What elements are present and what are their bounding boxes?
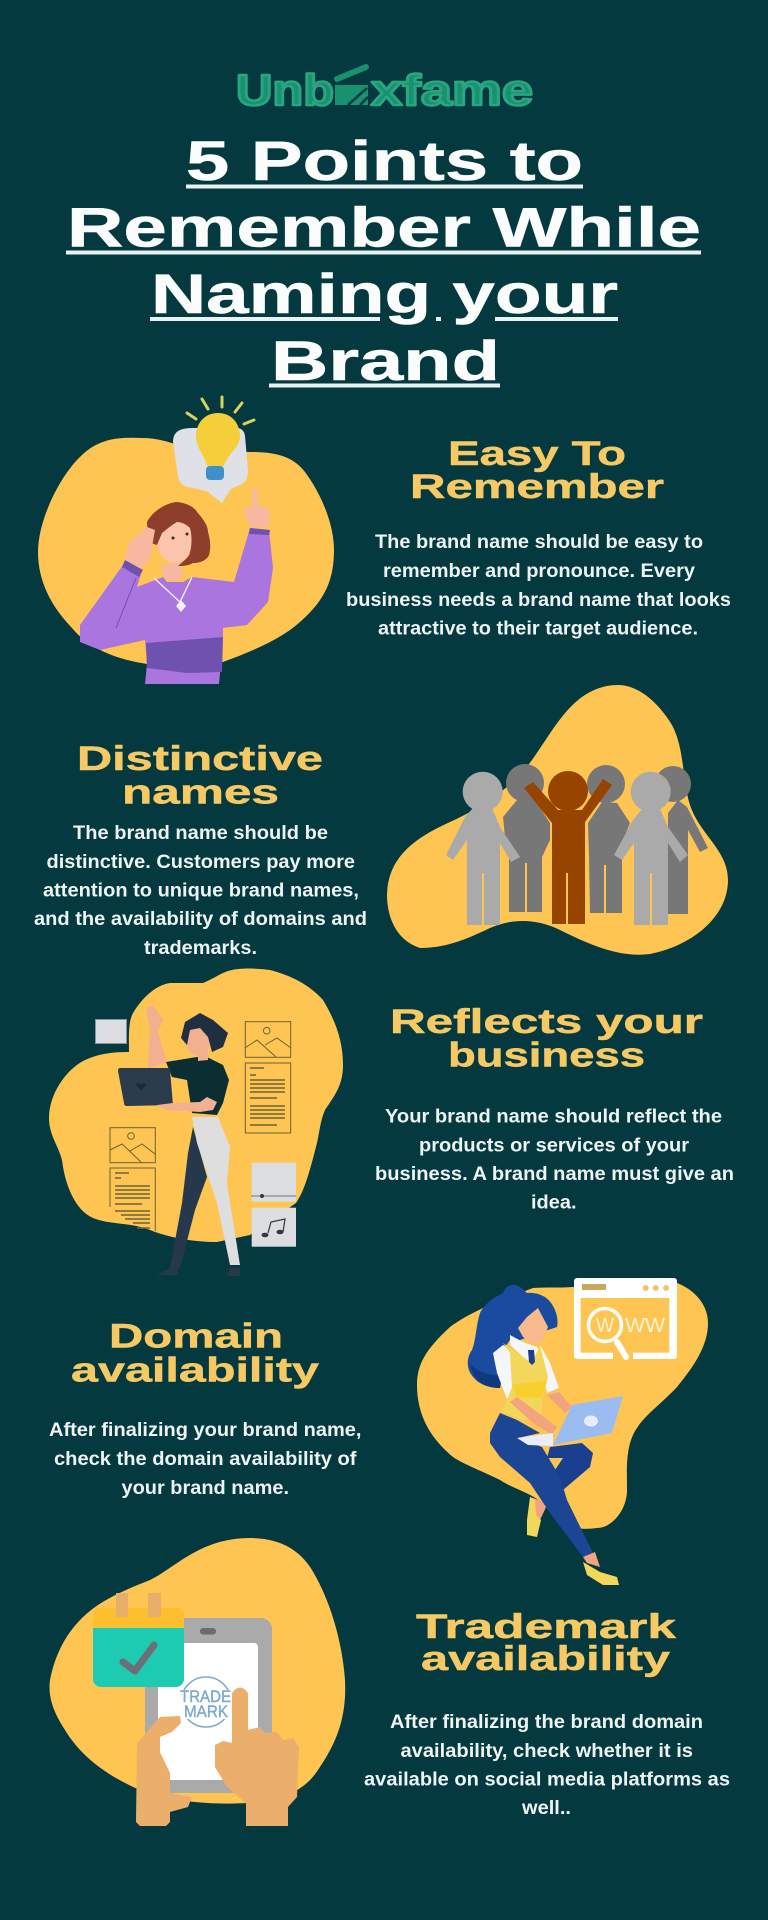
icon: trademark stamp: TRADE xyxy=(180,1688,231,1706)
icon: hands on phone xyxy=(136,1688,299,1826)
title: Remember While xyxy=(67,196,701,258)
heading: Domain availability xyxy=(71,1318,319,1390)
text: Reflects your business body: products or services of your xyxy=(419,1134,689,1156)
icon: browser window with www search: W xyxy=(596,1315,614,1337)
text: Distinctive names body: distinctive. Customers pay more xyxy=(46,851,355,873)
blob 5 xyxy=(50,1538,345,1804)
floating square xyxy=(96,1020,126,1044)
heading: Distinctive names: names xyxy=(122,774,279,812)
heading: Easy To Remember xyxy=(410,435,664,506)
title: Naming your xyxy=(151,262,618,325)
title: 5 Points to xyxy=(186,129,583,192)
heading: Trademark availability: Trademark xyxy=(416,1608,676,1646)
title xyxy=(66,129,701,392)
icon: trademark stamp: MARK xyxy=(184,1703,228,1721)
text: Trademark availability body: available on social media platforms as xyxy=(364,1768,730,1790)
woman thinking xyxy=(80,488,273,684)
heading: Distinctive names: Distinctive xyxy=(77,740,323,778)
heading: Domain availability: availability xyxy=(71,1352,319,1390)
blob 4 xyxy=(417,1283,708,1529)
logo: Unboxfame xyxy=(236,66,533,115)
logo: Unboxfame: xfame xyxy=(371,66,533,115)
image frame bottom xyxy=(110,1128,155,1163)
heading: Domain availability: Domain xyxy=(109,1318,283,1356)
text: Easy To Remember body: remember and pronounce. Every xyxy=(383,560,695,582)
logo: Unboxfame: Unb xyxy=(236,66,334,115)
text: Domain availability body xyxy=(49,1419,362,1499)
text: Domain availability body: your brand name. xyxy=(122,1477,289,1499)
text: Trademark availability body: After finalizing the brand domain xyxy=(390,1711,703,1733)
text: Easy To Remember body xyxy=(346,531,731,640)
icon: trademark stamp xyxy=(178,1677,232,1727)
heading: Trademark availability xyxy=(416,1608,676,1678)
text: Reflects your business body: business. A brand name must give an xyxy=(375,1163,734,1185)
heading: Easy To Remember: Easy To xyxy=(448,435,626,473)
heading: Easy To Remember: Remember xyxy=(410,468,664,506)
panel: Distinctive names illustration xyxy=(387,685,728,955)
text: Reflects your business body: idea. xyxy=(531,1192,576,1214)
title: Brand xyxy=(271,329,500,392)
heading: Reflects your business: business xyxy=(448,1036,645,1074)
phone xyxy=(145,1618,272,1793)
icon: browser window with www search: WW xyxy=(625,1315,665,1337)
text: Reflects your business body: Your brand name should reflect the xyxy=(385,1106,722,1128)
heading: Trademark availability: availability xyxy=(421,1640,670,1678)
image frame top xyxy=(245,1022,291,1057)
panel: Trademark availability illustration xyxy=(50,1538,345,1826)
text: Domain availability body: After finalizing your brand name, xyxy=(49,1419,362,1441)
heading: Reflects your business: Reflects your xyxy=(390,1003,703,1041)
blob 2 xyxy=(387,685,728,955)
text: Easy To Remember body: attractive to their target audience. xyxy=(378,618,698,640)
text: Reflects your business body xyxy=(375,1106,734,1214)
text: Distinctive names body: attention to unique brand names, xyxy=(43,880,359,902)
blob 3 xyxy=(49,968,343,1242)
heading: Distinctive names xyxy=(77,740,323,812)
document top xyxy=(245,1063,291,1133)
blob 1 xyxy=(38,438,334,664)
panel: Easy To Remember illustration xyxy=(38,397,334,684)
icon: calendar check xyxy=(93,1593,184,1687)
text: Distinctive names body: The brand name should be xyxy=(73,822,328,844)
woman sitting with laptop xyxy=(468,1285,623,1585)
heading: Reflects your business xyxy=(390,1003,703,1074)
text: Easy To Remember body: business needs a brand name that looks xyxy=(346,589,731,611)
icon: browser window with www search xyxy=(574,1278,677,1360)
text: Trademark availability body: availability, check whether it is xyxy=(400,1740,693,1762)
media tiles xyxy=(251,1163,296,1247)
document bottom xyxy=(110,1168,155,1231)
people group xyxy=(446,764,708,925)
panel: Reflects your business illustration xyxy=(49,968,343,1276)
woman with laptop xyxy=(118,1005,240,1276)
text: Distinctive names body: trademarks. xyxy=(144,937,257,959)
text: Distinctive names body: and the availability of domains and xyxy=(34,908,367,930)
text: Trademark availability body: well.. xyxy=(521,1797,571,1819)
text: Distinctive names body xyxy=(34,822,367,959)
text: Domain availability body: check the domain availability of xyxy=(54,1448,357,1470)
text: Trademark availability body xyxy=(364,1711,730,1819)
text: Easy To Remember body: The brand name should be easy to xyxy=(375,531,703,553)
icon: light bulb bubble xyxy=(173,397,254,503)
panel: Domain availability illustration xyxy=(417,1278,708,1585)
